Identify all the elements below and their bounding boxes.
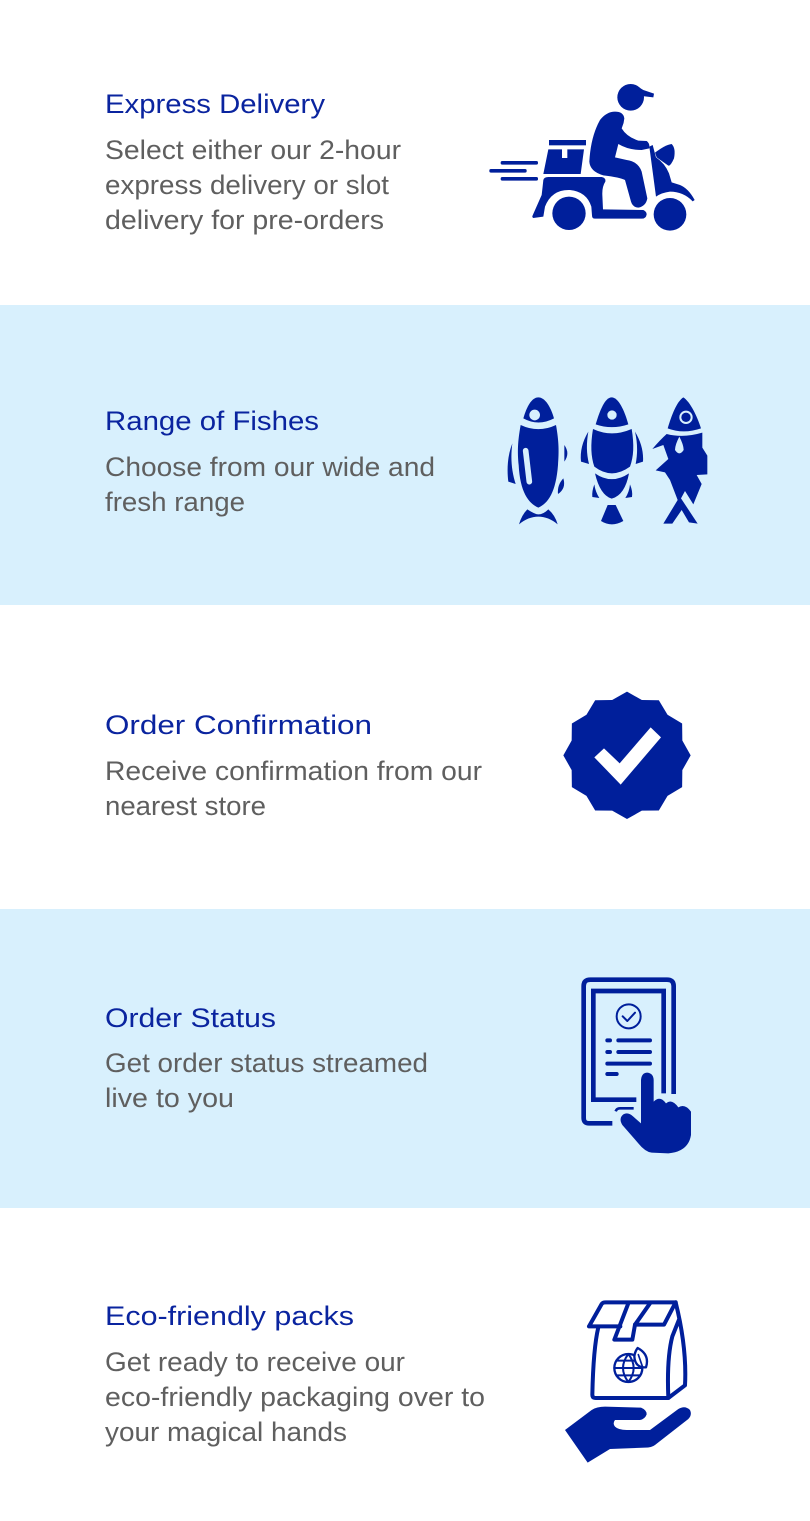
text block: range of fishes description: fresh range <box>105 487 245 517</box>
icon: three fishes <box>508 397 707 524</box>
panel: eco-friendly packs <box>105 1301 691 1463</box>
text block: express delivery description: express delivery or slot <box>105 170 390 200</box>
text block: express delivery description: Select either our 2-hour <box>105 135 401 165</box>
text block: express delivery description: delivery for pre-orders <box>105 205 384 235</box>
heading: order confirmation: Order Confirmation <box>105 710 372 740</box>
heading: order status: Order Status <box>105 1003 276 1033</box>
panel: range of fishes <box>0 305 810 605</box>
heading: eco-friendly packs: Eco-friendly packs <box>105 1301 354 1331</box>
heading: range of fishes: Range of Fishes <box>105 406 319 436</box>
text block: order status description: live to you <box>105 1083 234 1113</box>
text block: eco-friendly packs description: Get ready to receive our <box>105 1347 405 1377</box>
icon: delivery rider on scooter <box>489 84 695 231</box>
text block: express delivery description <box>105 135 401 235</box>
panel: order confirmation <box>105 692 691 821</box>
panel background <box>0 909 810 1208</box>
text block: order confirmation description: nearest store <box>105 791 266 821</box>
text block: eco-friendly packs description <box>105 1347 485 1447</box>
text block: order confirmation description: Receive confirmation from our <box>105 756 482 786</box>
icon: verified badge with check mark <box>563 692 691 819</box>
text block: order status description: Get order status streamed <box>105 1048 428 1078</box>
text block: eco-friendly packs description: eco-friendly packaging over to <box>105 1382 485 1412</box>
text block: eco-friendly packs description: your magical hands <box>105 1417 347 1447</box>
panel: order status <box>0 909 810 1208</box>
icon: hand holding eco-friendly bag <box>565 1302 691 1463</box>
panel background <box>0 305 810 605</box>
panel: express delivery <box>105 84 695 235</box>
icon: finger tapping a tablet <box>584 980 691 1153</box>
text block: range of fishes description: Choose from our wide and <box>105 452 435 482</box>
text block: order confirmation description <box>105 756 482 821</box>
text block: order status description <box>105 1048 428 1113</box>
heading: express delivery: Express Delivery <box>105 89 326 119</box>
text block: range of fishes description <box>105 452 435 517</box>
